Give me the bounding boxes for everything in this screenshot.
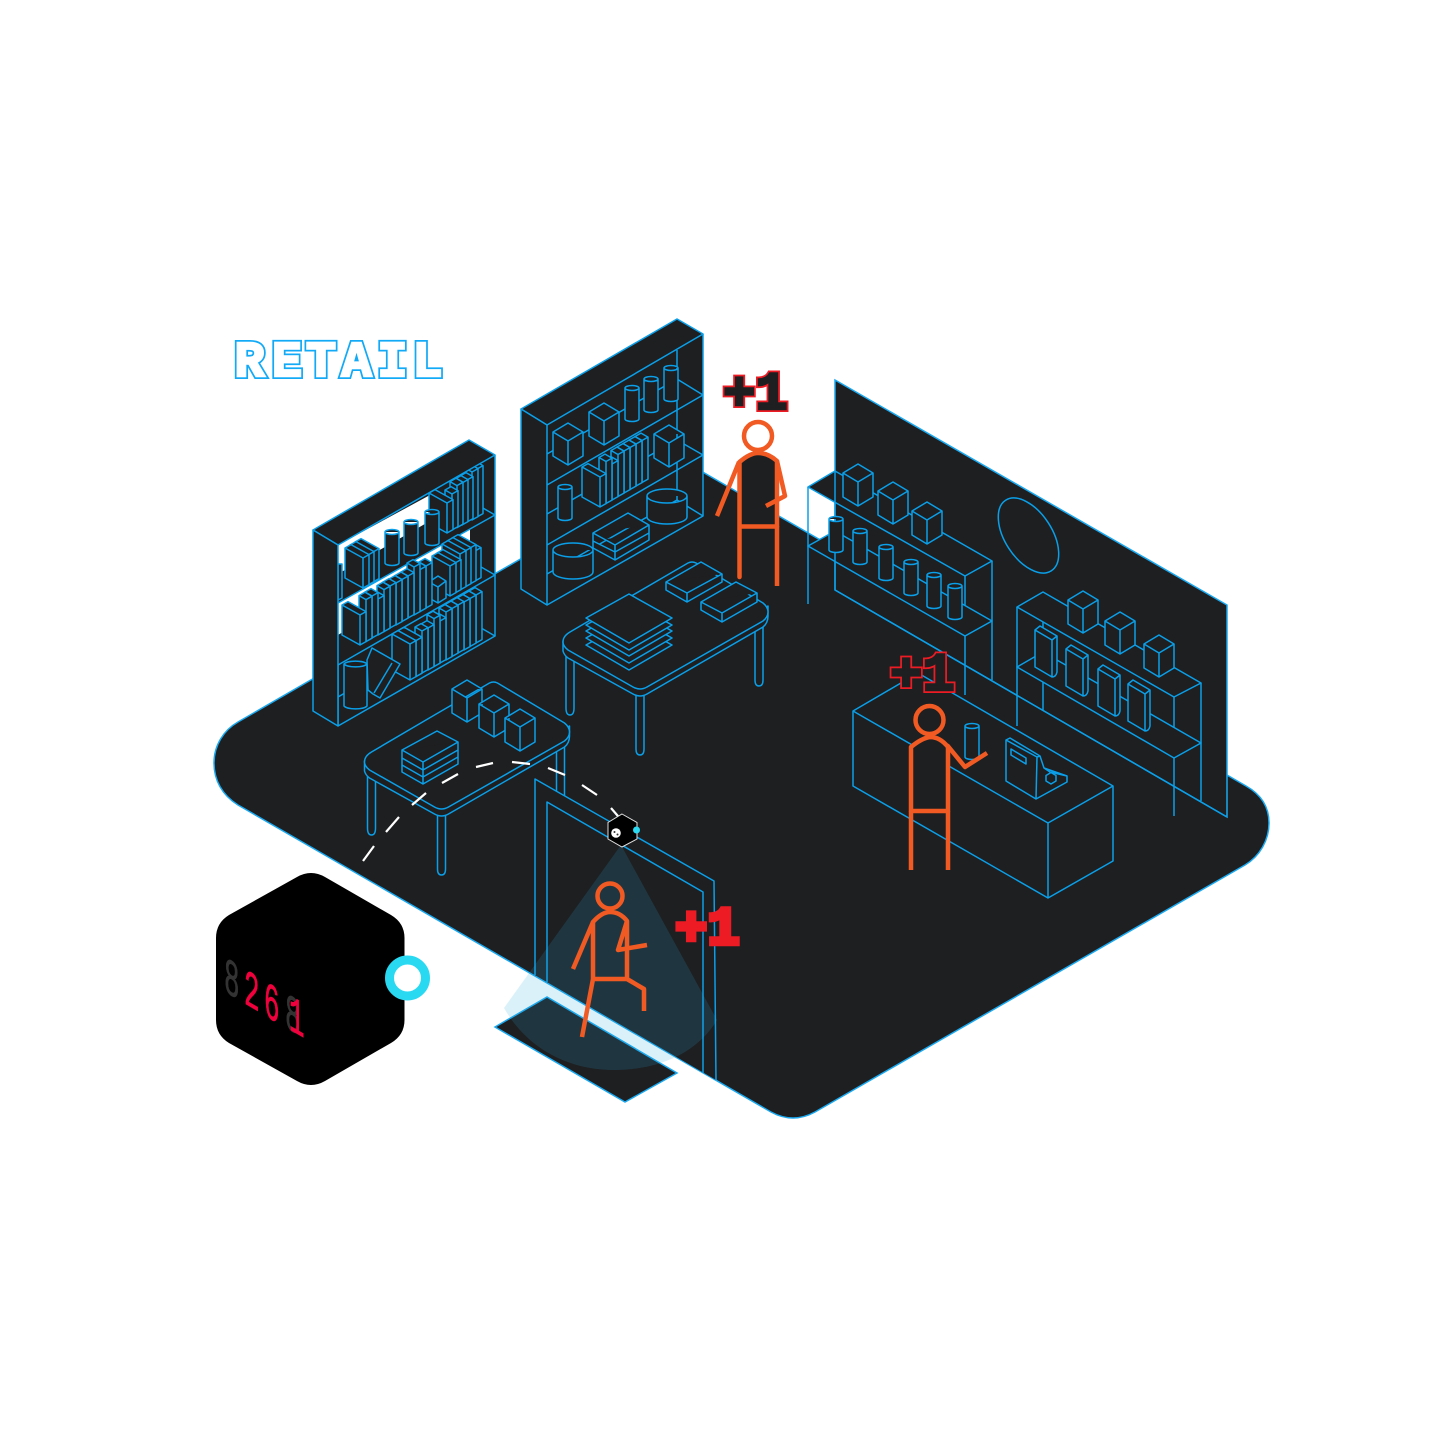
device readout: 8 [224,948,240,1016]
title: RETAIL [234,335,443,392]
device readout: 6 [264,972,280,1040]
title: RETAIL [234,335,443,392]
checkout counter [853,673,1113,898]
sensor light cone [504,845,717,1070]
counter device [216,873,426,1085]
front table [364,682,570,875]
device readout: 8 [285,984,301,1052]
centre table with stacks [563,562,768,755]
left bookshelf [313,440,495,726]
+1 shelf customer: +1 [723,365,788,426]
floor [214,463,1269,1118]
device readout [224,948,305,1054]
wall shelf with tall boxes [1017,591,1201,816]
person at counter [911,706,987,870]
+1 counter customer: +1 [890,646,955,707]
device readout: 1 [289,986,305,1054]
wall shelf with boxes and cylinders [808,464,1227,817]
door mat [495,997,677,1102]
door sensor [608,814,640,847]
wall mirror [986,487,1071,584]
person entering door [573,884,647,1037]
centre bookshelf [521,319,703,605]
dashed signal arc [363,762,623,861]
table items [402,680,535,784]
device readout: 2 [244,960,260,1028]
person by shelf [717,422,785,586]
+1 counter customer: +1 [890,646,955,707]
back wall [835,380,1227,817]
+1 door customer: +1 [675,900,740,961]
+1 shelf customer: +1 [723,365,788,426]
door frame [535,779,716,1080]
